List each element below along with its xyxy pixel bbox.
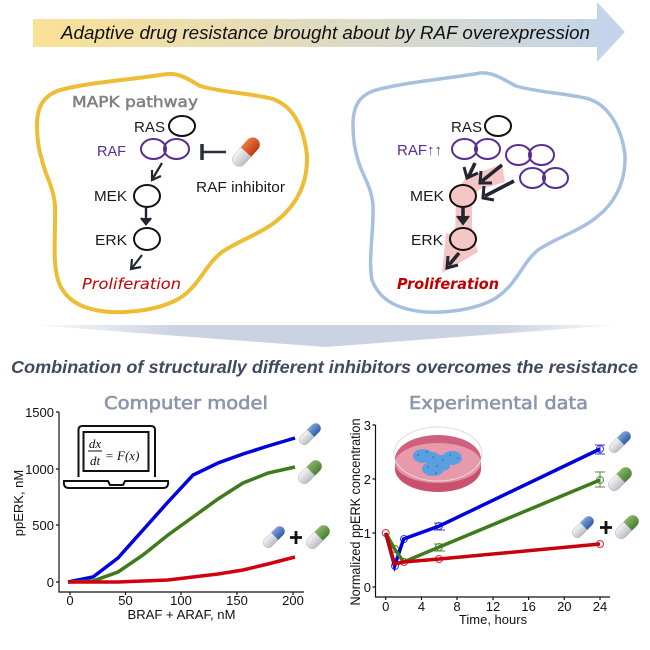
icon: blue pill (607, 429, 633, 455)
red line (386, 533, 600, 564)
x axis label: Time, hours (459, 612, 528, 627)
blue line (386, 449, 600, 566)
icon: RAF inhibitor pill (229, 135, 263, 169)
icon: blue plus green combination (570, 513, 641, 541)
icon: blue pill (297, 421, 323, 447)
pink activation band (442, 164, 505, 273)
x tick labels: 200 (282, 593, 304, 608)
icon: green pill (296, 458, 324, 486)
banner title: Adaptive drug resistance brought about by RAF overexpression (60, 22, 590, 43)
heading: Computer model: Computer model (104, 393, 268, 414)
icon: laptop with equation (64, 426, 168, 488)
x tick labels: 0 (66, 593, 74, 608)
arrow MEK to ERK (141, 208, 151, 224)
y tick labels: 0 (47, 575, 54, 590)
MEK oval (450, 185, 476, 207)
x tick labels: 8 (453, 599, 461, 614)
x tick labels: 12 (486, 599, 500, 614)
green line (386, 480, 600, 562)
heading: Experimental data: Experimental data (409, 393, 588, 414)
icon: laptop with equation: dt (90, 453, 100, 468)
y axis label: ppERK, nM (11, 470, 26, 536)
arrow RAF to MEK (152, 163, 162, 180)
RAF dimers (452, 139, 568, 188)
y tick labels: 2 (364, 472, 371, 487)
MEK oval (134, 185, 160, 207)
x axis label: BRAF + ARAF, nM (128, 607, 236, 622)
MEK label: MEK (410, 188, 444, 205)
x tick labels: 16 (521, 599, 536, 614)
RAF dimer (141, 139, 189, 159)
arrow ERK to proliferation (131, 255, 142, 269)
x tick labels: 4 (418, 599, 425, 614)
panel: computer model chart (11, 393, 332, 622)
green curve (68, 467, 295, 582)
y tick labels: 0 (364, 580, 371, 595)
y tick labels (25, 405, 54, 590)
RAF inhibitor label: RAF inhibitor (196, 179, 285, 196)
MEK label: MEK (94, 188, 127, 205)
icon: petri dish with cells (394, 427, 482, 492)
x tick labels: 50 (118, 593, 133, 608)
error bars and markers (382, 445, 605, 570)
y tick labels: 500 (32, 518, 54, 533)
RAS label: RAS (134, 119, 165, 136)
heading: MAPK pathway: MAPK pathway (72, 93, 198, 111)
icon: green pill (606, 465, 634, 493)
red curve (68, 557, 295, 582)
x tick labels (66, 593, 304, 608)
RAS label: RAS (451, 119, 482, 136)
axes (372, 425, 610, 600)
top arrow banner (33, 2, 625, 62)
section heading: Combination of structurally different inhibitors overcomes the resistance (11, 357, 638, 377)
Proliferation label: Proliferation (397, 275, 499, 293)
ERK oval (450, 228, 476, 250)
RAF label: RAF (97, 143, 126, 160)
thick arrows (447, 163, 514, 268)
x tick labels: 20 (557, 599, 572, 614)
icon: laptop with equation: dx (89, 436, 101, 451)
inhibition bar (202, 144, 226, 160)
x tick labels (382, 599, 607, 614)
panel: experimental data chart (348, 393, 641, 627)
axes (56, 412, 304, 595)
RAF up label: RAF↑↑ (397, 142, 442, 159)
RAS oval (169, 116, 195, 136)
RAS oval (485, 116, 511, 136)
x tick labels: 24 (593, 599, 607, 614)
y tick labels: 3 (364, 418, 371, 433)
ERK oval (134, 228, 160, 250)
wedge divider arrow (33, 325, 617, 347)
panel: RAF overexpression (353, 73, 625, 312)
Proliferation label: Proliferation (82, 275, 181, 293)
x tick labels: 100 (170, 593, 192, 608)
y tick labels: 1000 (25, 462, 54, 477)
blue curve (68, 438, 295, 582)
y tick labels (364, 418, 371, 595)
x tick labels: 150 (226, 593, 248, 608)
y tick labels: 1500 (25, 405, 54, 420)
y axis label: Normalized ppERK concentration (348, 418, 363, 606)
x tick labels: 0 (382, 599, 389, 614)
cell outline blue (353, 73, 625, 312)
y tick labels: 1 (364, 526, 371, 541)
cell outline yellow (37, 74, 307, 312)
icon: blue plus green combination (261, 523, 332, 551)
icon: laptop with equation: = F(x) (105, 448, 139, 463)
panel: MAPK pathway with RAF inhibitor (37, 74, 307, 312)
ERK label: ERK (411, 232, 443, 249)
ERK label: ERK (95, 232, 127, 249)
